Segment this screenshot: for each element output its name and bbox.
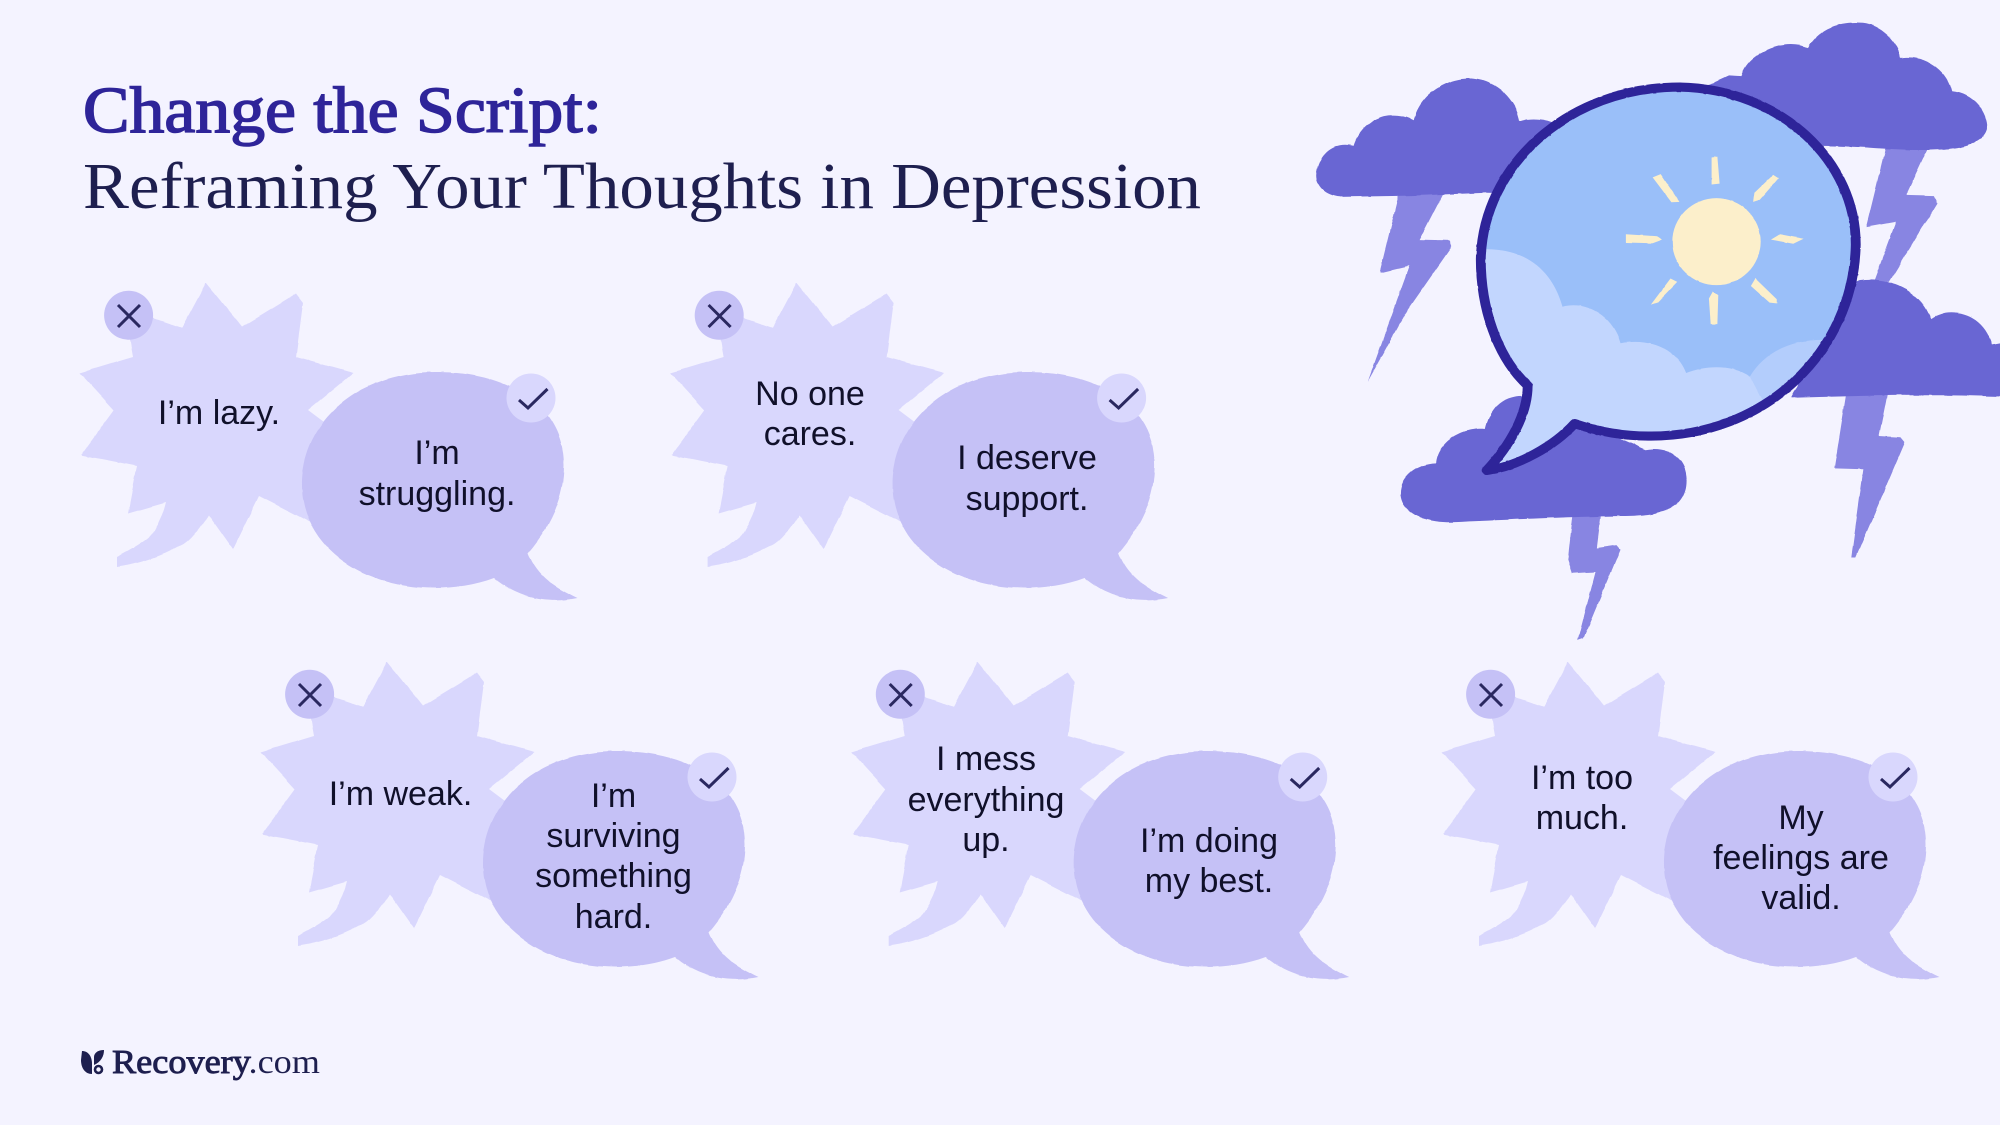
storm clouds <box>1316 22 2000 522</box>
burst: negative thought <box>80 283 353 567</box>
positive text: valid. <box>1761 879 1841 917</box>
sun <box>1626 157 1804 324</box>
icon: check <box>1097 374 1146 422</box>
logo wordmark: Recovery.com <box>112 1044 320 1081</box>
positive text: something <box>535 857 692 895</box>
positive text: My <box>1778 799 1824 837</box>
positive text: surviving <box>546 817 681 855</box>
positive text: I’m <box>414 434 460 472</box>
negative text: cares. <box>764 415 856 453</box>
lightning bolts <box>1368 145 1937 640</box>
icon: check <box>1278 752 1327 802</box>
negative text: everything <box>908 781 1064 819</box>
panel: I'm too much to My feelings are valid <box>1442 662 1939 979</box>
burst: negative thought <box>852 662 1125 946</box>
negative text: I mess <box>936 740 1036 778</box>
icon: check <box>1868 752 1918 802</box>
negative text: much. <box>1536 799 1628 837</box>
icon: cross <box>1466 670 1515 719</box>
burst: negative thought <box>671 283 944 567</box>
negative text: I’m too <box>1531 759 1633 797</box>
positive text: feelings are <box>1713 839 1889 877</box>
logo <box>81 1044 320 1081</box>
title line 1: Change the Script: <box>83 74 602 147</box>
speech bubble with sky <box>1474 87 1862 497</box>
panel: I mess everything up to I'm doing my best <box>852 662 1349 979</box>
panel: I'm weak to I'm surviving something hard <box>261 662 758 979</box>
burst: negative thought <box>261 662 534 946</box>
icon: cross <box>695 291 744 340</box>
illustration: storm clouds and speech bubble with sun <box>1316 22 2000 640</box>
negative text: I’m weak. <box>329 775 472 813</box>
positive text: hard. <box>575 898 652 936</box>
panel: I'm lazy to I'm struggling <box>80 283 577 600</box>
negative text: up. <box>962 821 1010 859</box>
title <box>83 74 1201 223</box>
positive text: I deserve <box>957 439 1097 477</box>
positive text: my best. <box>1145 862 1273 900</box>
title line 2: Reframing Your Thoughts in Depression <box>83 150 1201 223</box>
positive text: I’m <box>591 777 636 815</box>
bubble: reframed thought <box>893 372 1168 600</box>
icon: cross <box>104 291 153 340</box>
bubble: reframed thought <box>1664 751 1939 979</box>
icon: check <box>506 374 556 422</box>
bubble: reframed thought <box>1074 751 1349 979</box>
icon: cross <box>876 670 925 719</box>
positive text: support. <box>966 480 1088 518</box>
panel: No one cares to I deserve support <box>671 283 1168 600</box>
bubble: reframed thought <box>302 372 577 600</box>
icon: cross <box>285 670 334 719</box>
negative text: No one <box>755 375 865 413</box>
negative text: I’m lazy. <box>158 394 280 432</box>
bubble: reframed thought <box>483 751 758 979</box>
positive text: struggling. <box>359 475 515 513</box>
icon: logo leaves <box>81 1050 104 1074</box>
burst: negative thought <box>1442 662 1715 946</box>
icon: check <box>688 752 736 802</box>
positive text: I’m doing <box>1140 822 1278 860</box>
